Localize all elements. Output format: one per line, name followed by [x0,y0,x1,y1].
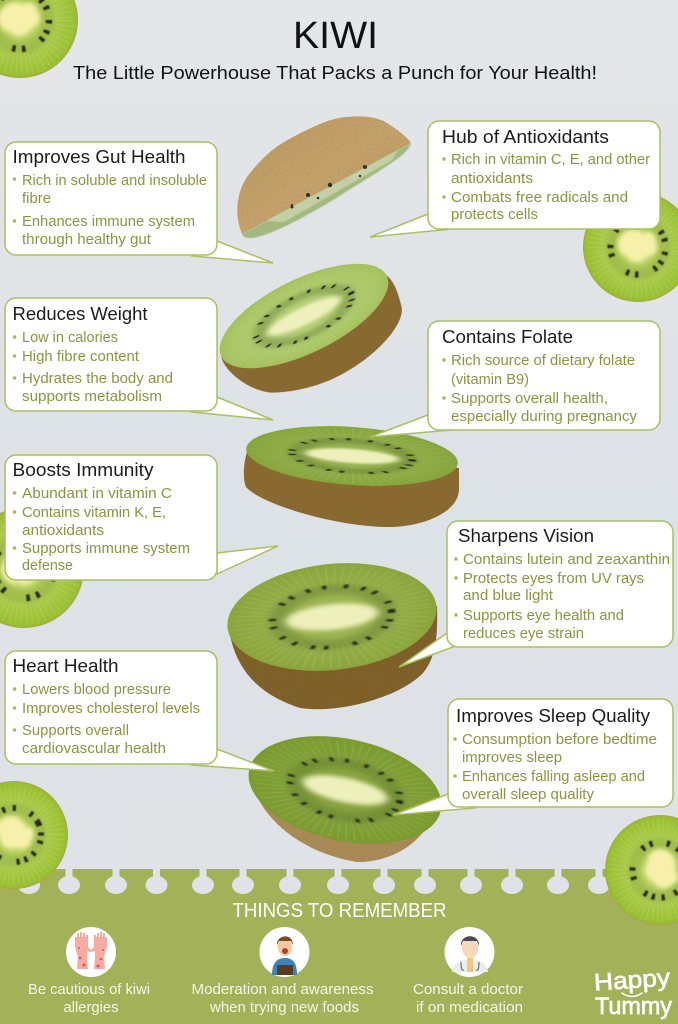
card [428,321,660,430]
bullets [13,330,173,405]
panel: improves gut health [5,142,273,263]
kiwi slice four [222,553,442,709]
icon: kiwi bottom right [596,806,678,934]
text: allergies tip: allergies [64,999,118,1016]
callout pointer [393,794,474,815]
bullets: cardiovascular health [22,741,166,757]
callout pointer [370,415,452,437]
icon: allergy hands [66,927,116,977]
bullets: Supports overall [22,723,129,739]
logo: Happy Tummy: Happy [593,964,671,997]
bullets [442,152,650,223]
text: moderation tip: when trying new foods [209,999,359,1016]
heading: Sharpens Vision [458,526,594,546]
bullets [13,682,200,757]
bullets: supports metabolism [22,389,162,405]
text: doctor tip: Consult a doctor [413,981,523,998]
heading: Hub of Antioxidants [442,127,609,147]
bullets: antioxidants [451,171,533,187]
heading: Boosts Immunity [12,460,154,480]
notched holes along band edge [18,866,610,894]
card [5,455,217,580]
bullets: Abundant in vitamin C [22,486,172,502]
panel: hub of antioxidants [370,121,660,237]
heading: things to remember: THINGS TO REMEMBER [232,900,446,922]
text: allergies tip [28,981,150,1016]
bullets [13,173,207,248]
kiwi slice three [244,420,460,527]
callout pointer [192,397,273,420]
bullets: Low in calories [22,330,118,346]
bullets: Improves cholesterol levels [22,701,200,717]
panel: improves sleep quality [393,699,673,815]
bullets: antioxidants [22,523,104,539]
bullets: Rich in soluble and insoluble [22,173,207,189]
bullets: Rich in vitamin C, E, and other [451,152,650,168]
bullets: overall sleep quality [462,787,595,803]
bullets: protects cells [451,207,538,223]
bullets [453,732,657,803]
bullets: reduces eye strain [463,626,584,642]
callout pointer [217,546,278,574]
kiwi slice five [239,720,451,862]
bullets: Combats free radicals and [451,190,628,206]
icon: kiwi right [574,183,678,311]
text: doctor tip: if on medication [416,999,523,1016]
bullets: Supports immune system [22,541,190,557]
card [5,298,217,411]
bullets: Consumption before bedtime [462,732,657,748]
bullets: especially during pregnancy [451,409,638,425]
kiwi slice two [205,242,419,419]
card [5,651,217,764]
bullets [454,552,670,642]
icon: doctor [444,927,494,977]
bullets [442,353,638,425]
panel: sharpens vision [399,521,673,667]
bullets: Enhances immune system [22,214,195,230]
panel: reduces weight [5,298,273,420]
panel: contains folate [370,321,660,437]
bullets: fibre [22,191,51,207]
card [428,121,660,229]
bullets: and blue light [463,588,553,604]
card [448,699,673,807]
bullets: through healthy gut [22,232,151,248]
logo: Happy Tummy [593,964,672,1020]
bullets: High fibre content [22,349,139,365]
panel: boosts immunity [5,455,278,580]
bullets: Protects eyes from UV rays [463,571,644,587]
bullets: Contains lutein and zeaxanthin [463,552,670,568]
logo: Happy Tummy: Tummy [595,993,672,1020]
bullets: Enhances falling asleep and [462,769,645,785]
text: allergies tip: Be cautious of kiwi [28,981,150,998]
card [5,142,217,255]
callout pointer [192,749,274,771]
bullets: Contains vitamin K, E, [22,505,166,521]
bullets: Rich source of dietary folate [451,353,635,369]
bullets [13,486,190,574]
callout pointer [399,633,453,667]
subtitle: The Little Powerhouse That Packs a Punch for Your Health! [73,62,597,83]
icon: corner kiwi top left [0,0,78,78]
heading: Improves Sleep Quality [456,706,650,726]
title: KIWI [293,15,378,57]
icon: man eating [260,927,310,977]
text: doctor tip [413,981,523,1016]
bullets: Lowers blood pressure [22,682,171,698]
callout pointer [192,241,273,263]
bullets: (vitamin B9) [451,372,529,388]
card [447,521,673,647]
bullets: Hydrates the body and [22,371,173,387]
heading: Contains Folate [442,327,573,347]
icon: kiwi bottom left [0,759,90,911]
panel: heart health [5,651,274,771]
bullets: defense [22,558,73,574]
text: moderation tip [192,981,374,1016]
heading: Improves Gut Health [12,147,186,167]
callout pointer [370,214,452,237]
icon: kiwi left middle [0,491,101,645]
kiwi half slice top [237,116,411,238]
bullets: improves sleep [462,750,562,766]
bullets: Supports overall health, [451,391,608,407]
text: moderation tip: Moderation and awareness [192,981,374,998]
heading: Reduces Weight [12,304,148,324]
heading: Heart Health [12,656,118,676]
panel: things to remember band [0,869,678,1024]
bullets: Supports eye health and [463,608,624,624]
